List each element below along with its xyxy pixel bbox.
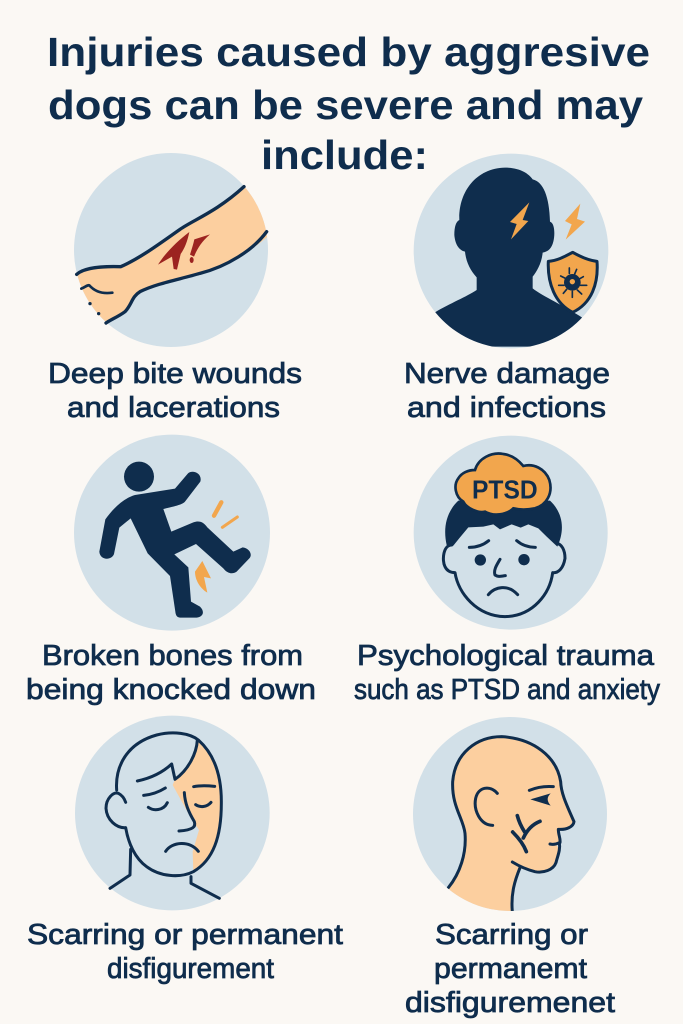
- icon: virus shield: [548, 252, 597, 312]
- label: psychological trauma: [354, 640, 660, 706]
- PTSD cloud: PTSD: [472, 474, 538, 504]
- icon: lightning bolt on head: [510, 202, 529, 239]
- label: deep bite wounds: and lacerations: [67, 392, 280, 424]
- icon: person falling: [74, 435, 270, 631]
- icon: injured arm with bite wound: [70, 153, 273, 347]
- icon: impact marks: [195, 502, 237, 593]
- icon: sad face with PTSD cloud: [414, 436, 608, 630]
- title: [47, 29, 650, 178]
- face outline: [443, 501, 565, 617]
- label: scarring left: [27, 919, 343, 985]
- label: nerve damage: Nerve damage: [404, 358, 610, 390]
- icon: head silhouette with nerve bolts and infection shield: [414, 154, 608, 348]
- label: psychological trauma: Psychological trauma: [357, 640, 655, 672]
- label: broken bones: being knocked down: [26, 674, 316, 706]
- label: broken bones: Broken bones from: [42, 640, 303, 672]
- icon: side profile head with cheek scar: [413, 717, 607, 917]
- label: broken bones: [26, 640, 316, 706]
- label: scarring right: permanemt: [434, 953, 587, 985]
- label: scarring right: disfiguremenet: [405, 987, 615, 1019]
- title: dogs can be severe and may: [48, 82, 643, 128]
- label: nerve damage: and infections: [407, 392, 606, 424]
- label: deep bite wounds: Deep bite wounds: [48, 358, 302, 390]
- title: Injuries caused by aggresive: [47, 29, 650, 75]
- icon: face with disfigured side: [75, 716, 270, 910]
- label: nerve damage: [404, 358, 610, 424]
- PTSD cloud: [456, 454, 550, 515]
- label: scarring right: Scarring or: [435, 919, 588, 951]
- title: include:: [261, 132, 428, 178]
- label: scarring left: Scarring or permanent: [27, 919, 343, 951]
- icon: lightning bolt beside head: [565, 204, 585, 240]
- label: scarring right: [405, 919, 615, 1019]
- label: scarring left: disfigurement: [107, 953, 274, 985]
- label: deep bite wounds: [48, 358, 302, 424]
